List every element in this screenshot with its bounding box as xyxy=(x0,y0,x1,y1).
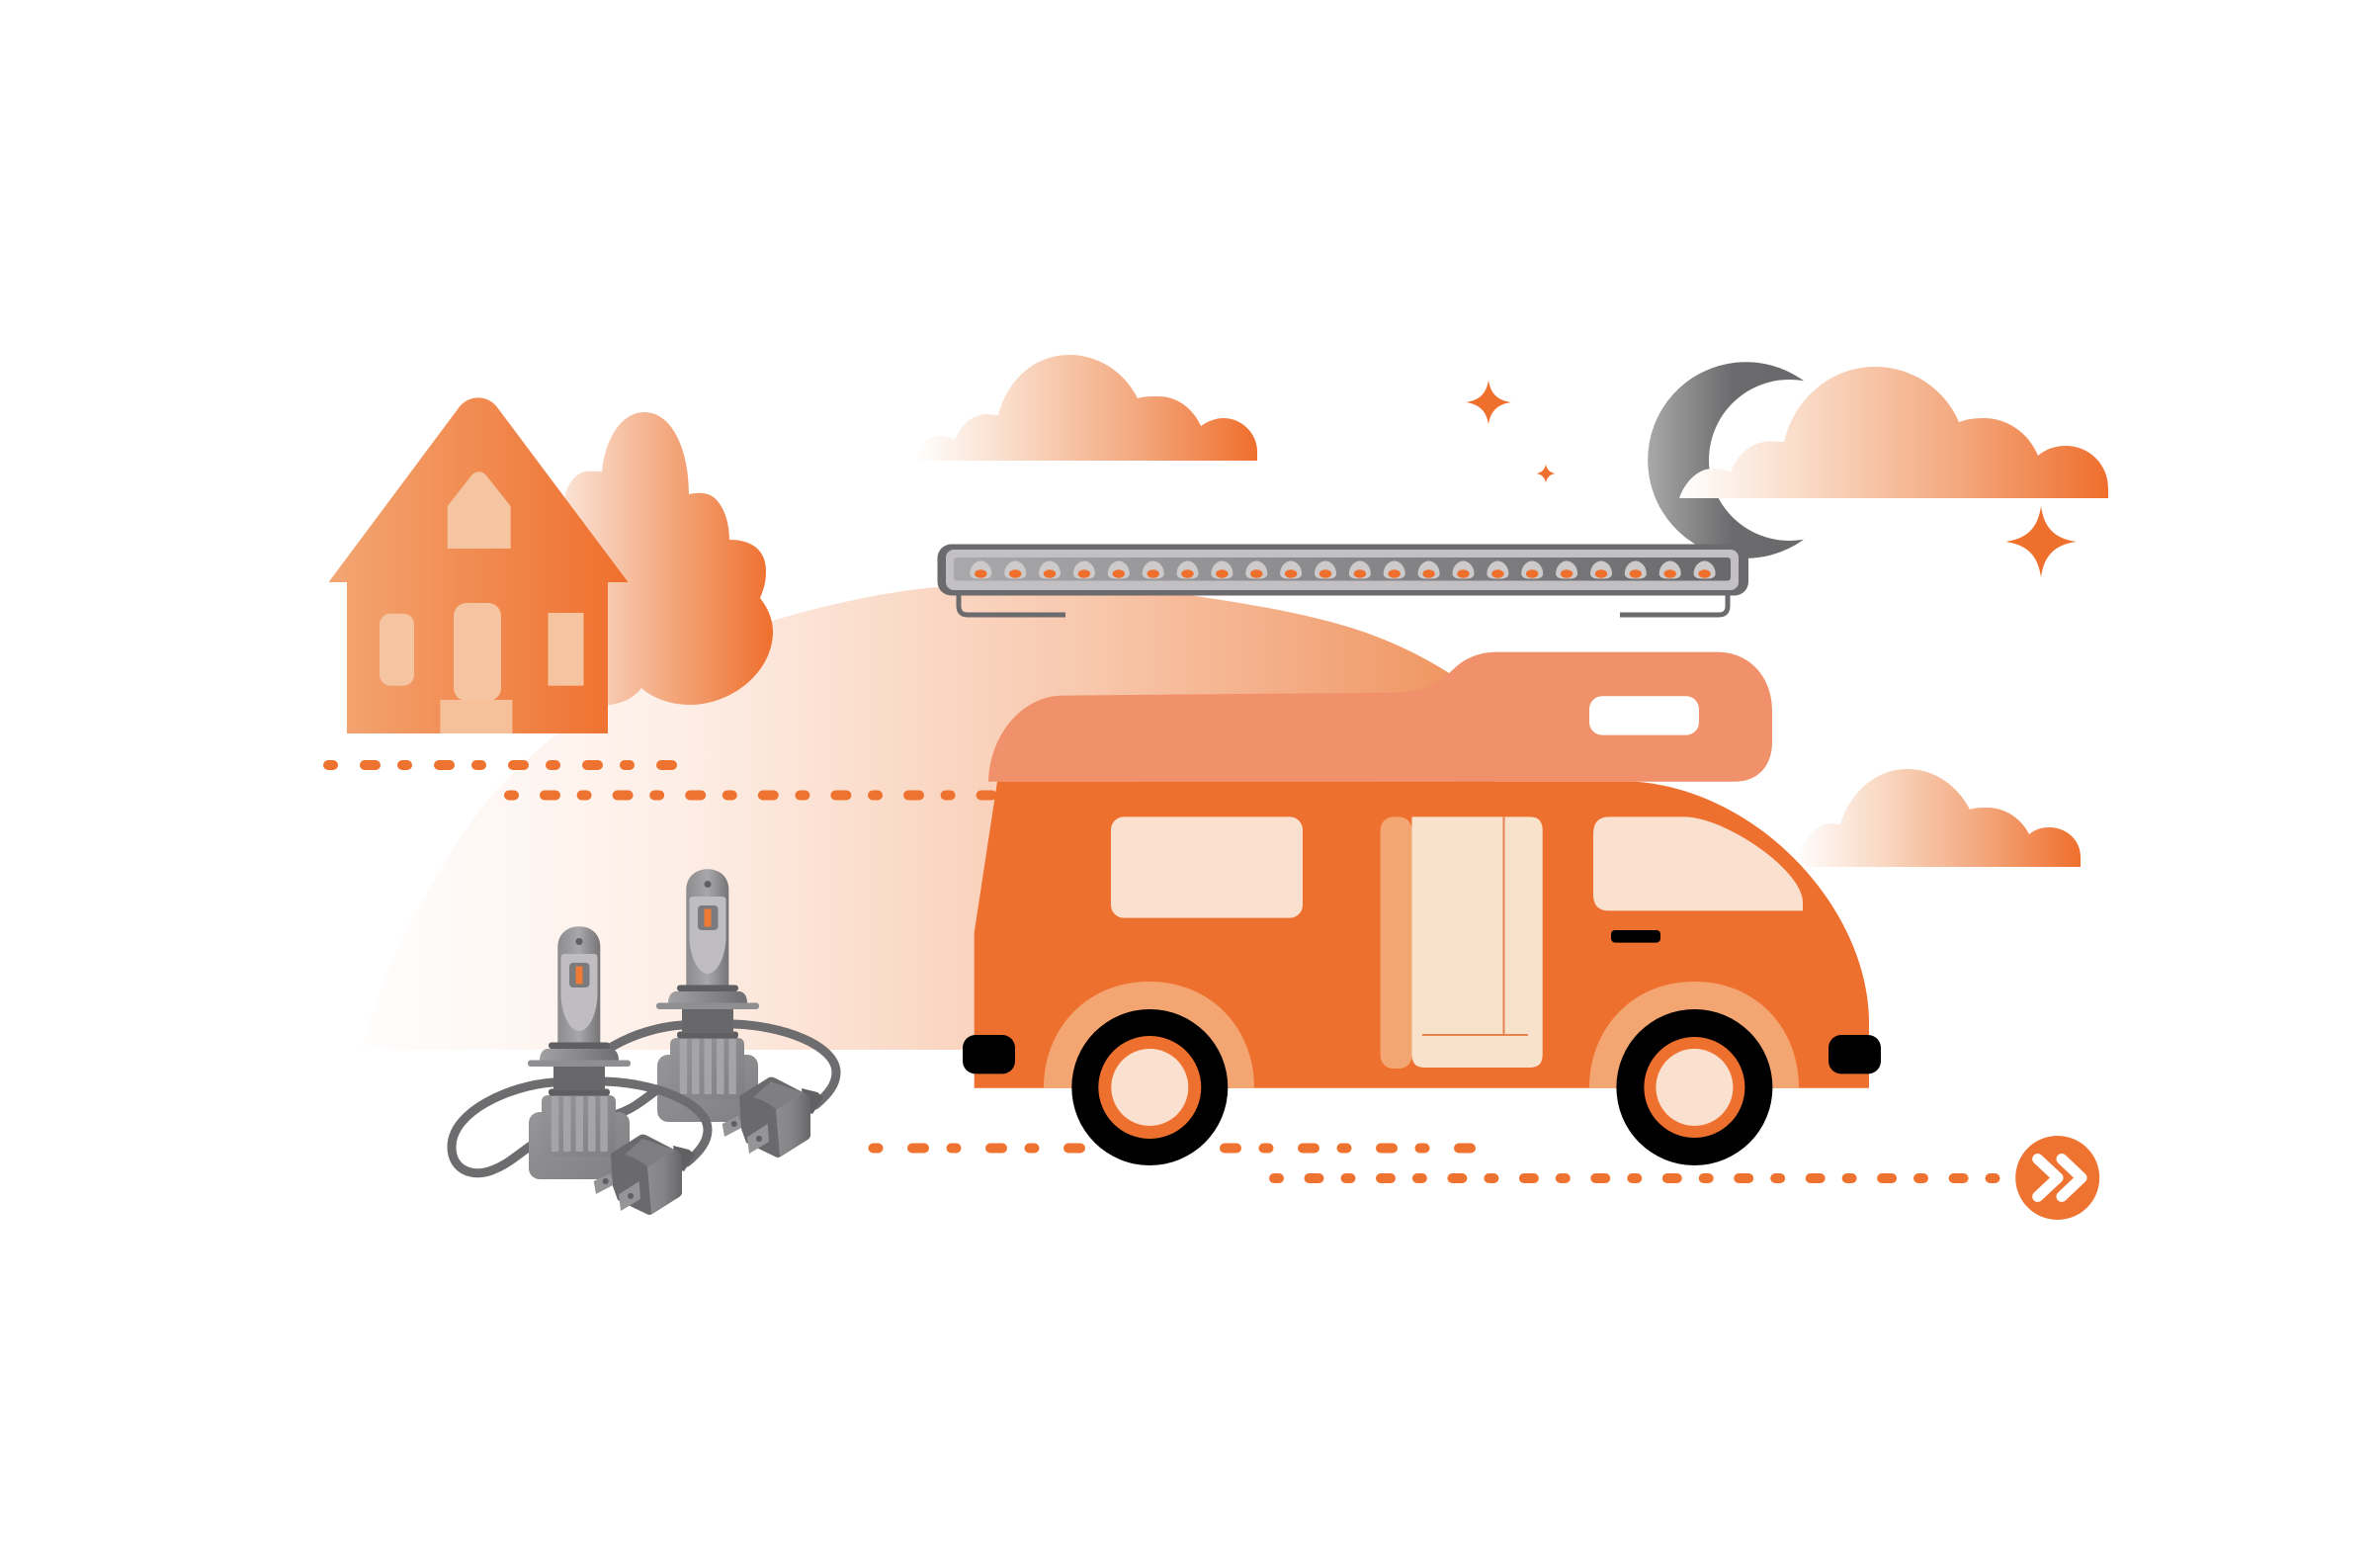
dormer window xyxy=(448,472,511,549)
camper roof cab xyxy=(988,652,1772,782)
bar lens xyxy=(946,550,1739,590)
house xyxy=(328,397,629,733)
bar housing xyxy=(937,544,1748,595)
roof window xyxy=(1589,696,1699,735)
house body and roof xyxy=(328,397,629,733)
cloud: top centre xyxy=(914,355,1257,461)
tree behind house xyxy=(563,412,773,705)
right bumper xyxy=(1828,1035,1881,1073)
LED headlight bulb: rear xyxy=(580,869,836,1158)
van body xyxy=(975,782,1869,1088)
icon: crescent moon xyxy=(1648,362,1804,558)
rear wheel xyxy=(1071,1009,1228,1165)
icon: large star xyxy=(1466,380,1511,425)
icon: forward arrow button xyxy=(2015,1136,2099,1220)
icon: small star xyxy=(1536,465,1556,482)
front windshield window xyxy=(1593,816,1803,910)
side window xyxy=(1111,816,1303,918)
cloud: upper right over moon xyxy=(1679,367,2108,498)
left window xyxy=(380,614,414,686)
door lines xyxy=(1422,816,1528,1035)
dotted road line 3 xyxy=(868,1143,1476,1153)
LED headlight bulb: front xyxy=(452,926,708,1215)
door handle xyxy=(1611,930,1660,943)
camper van xyxy=(963,652,1881,1165)
door step xyxy=(440,700,512,733)
LED emitters xyxy=(970,561,1716,579)
front wheel xyxy=(1616,1009,1772,1165)
rear wheel arch xyxy=(1044,982,1254,1088)
cloud: lower right xyxy=(1794,769,2081,867)
door pillar xyxy=(1381,816,1412,1069)
LED strip xyxy=(954,558,1731,581)
background hill xyxy=(361,584,1581,1050)
side door xyxy=(1411,816,1543,1068)
front door xyxy=(454,603,501,701)
icon: right star xyxy=(2005,506,2077,577)
right window xyxy=(548,613,583,686)
front wheel arch xyxy=(1589,982,1799,1088)
LED light bar xyxy=(937,544,1748,615)
dotted road line 2 xyxy=(504,791,997,801)
dotted road line 4 xyxy=(1269,1173,2000,1183)
dotted road line 1 xyxy=(323,760,677,770)
bar mounting brackets xyxy=(959,593,1728,615)
left bumper xyxy=(963,1035,1015,1073)
